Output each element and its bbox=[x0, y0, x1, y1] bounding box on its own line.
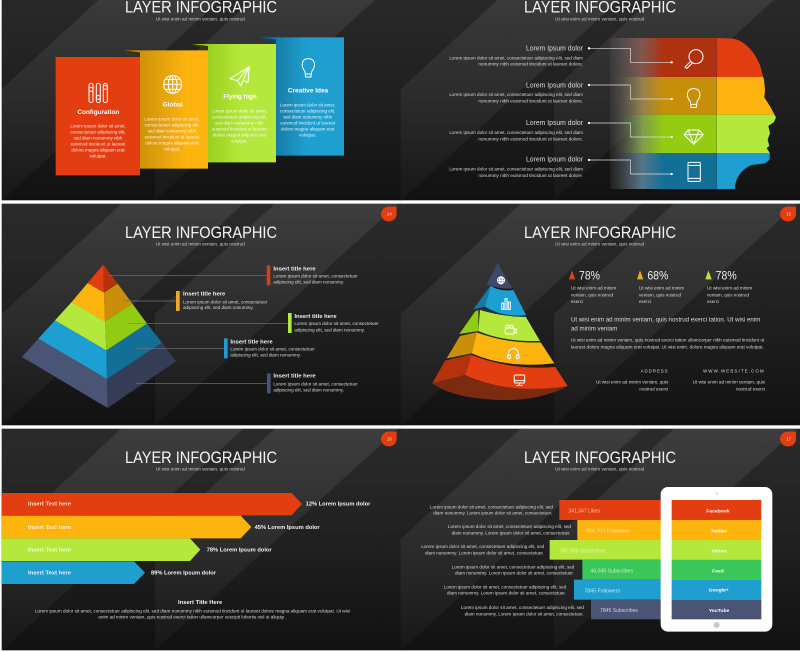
card: global: Global bbox=[163, 101, 183, 108]
icon: tablet bbox=[688, 162, 700, 181]
left descriptions: diam nonummy. Lorem ipsum dolor sit amet, consectetuer. bbox=[465, 611, 584, 616]
callout 1: adipiscing elit, sed diam nonummy. bbox=[273, 280, 344, 285]
card: global: euismod tincidunt ut laoreet bbox=[145, 134, 200, 139]
pyramid bbox=[22, 265, 176, 408]
callout 3 bbox=[128, 313, 379, 333]
tablet row: YouTube: YouTube bbox=[709, 608, 730, 614]
background bbox=[2, 0, 402, 201]
icon: monitor bbox=[514, 375, 525, 385]
tablet row: Feed: Feed bbox=[712, 568, 724, 574]
callout 4 bbox=[137, 338, 315, 358]
description: ad minim veniam bbox=[571, 325, 617, 332]
tablet row: Twitter: Twitter bbox=[711, 528, 727, 534]
stat 2 bbox=[637, 269, 685, 304]
stat 3: exerci bbox=[707, 299, 719, 304]
card: flying high: Lorem ipsum dolor sit amet, bbox=[212, 108, 267, 113]
title: LAYER INFOGRAPHIC bbox=[125, 448, 277, 467]
callout 5: Insert title here bbox=[273, 374, 316, 380]
arrow 3 bbox=[2, 538, 272, 561]
slide 6: tablet social stats bbox=[401, 429, 800, 651]
callout 5: adipiscing elit, sed diam nonummy. bbox=[273, 387, 344, 392]
item 2: Lorem Ipsum dolor bbox=[526, 82, 584, 89]
address: ADDRESS bbox=[641, 368, 668, 373]
stat 1 bbox=[569, 269, 617, 304]
faded colour bands bbox=[610, 38, 717, 189]
card: flying high: euismod tincidunt ut laoreet bbox=[212, 126, 268, 131]
subtitle: Ut wisi enim ad minim veniam, quis nostrud bbox=[555, 17, 645, 22]
card: configuration: Lorem ipsum dolor sit amet, bbox=[70, 124, 126, 129]
subtitle: Ut wisi enim ad minim veniam, quis nostrud bbox=[555, 467, 645, 472]
page badge: 16 bbox=[387, 437, 392, 442]
description: laoreet dolore magna aliquam erat volutpat. Ut wisi enim. dolore magna aliquam erat volutpat. bbox=[571, 345, 764, 350]
arrow 1 bbox=[2, 493, 371, 515]
left descriptions: Lorem ipsum dolor sit amet, consectetuer adipiscing elit, sed bbox=[444, 584, 567, 589]
left descriptions: Lorem ipsum dolor sit amet, consectetuer adipiscing elit, sed bbox=[452, 565, 575, 570]
stat 2: veniam, quis nostrud bbox=[639, 292, 681, 297]
description: Ut wisi enim ad minim veniam, quis nostrud exerci tation ullamcorper nibh euismod tincidunt ut bbox=[571, 338, 765, 343]
website: nostrud exerci bbox=[736, 387, 765, 392]
card: flying high: consectetuer adipiscing elit, bbox=[212, 114, 267, 119]
item 1: nonummy nibh euismod tincidunt ut laoreet dolore. bbox=[478, 62, 583, 67]
subtitle: Ut wisi enim ad minim veniam, quis nostrud bbox=[555, 242, 645, 247]
item 4: nonummy nibh euismod tincidunt ut laoreet dolore. bbox=[478, 173, 583, 178]
page badge: 15 bbox=[786, 212, 792, 217]
callout 3: adipiscing elit, sed diam nonummy. bbox=[294, 327, 365, 332]
background bbox=[2, 429, 402, 651]
card: creative idea: volutpat. bbox=[299, 133, 316, 138]
arrow 4 bbox=[2, 561, 217, 584]
item 2 bbox=[449, 82, 673, 103]
background bbox=[401, 0, 800, 201]
card: global: volutpat. bbox=[164, 146, 180, 151]
callout 1 bbox=[108, 265, 358, 285]
icon: camera bbox=[505, 325, 516, 334]
card: configuration: consectetuer adipiscing elit, bbox=[70, 130, 126, 135]
callout 1: Insert title here bbox=[273, 266, 316, 272]
page badge bbox=[381, 432, 397, 446]
card: creative idea: Creative Idea bbox=[288, 88, 329, 95]
card: configuration: volutpat. bbox=[90, 154, 106, 159]
item 4: Lorem ipsum dolor sit amet, consectetuer adipiscing elit, sed diam bbox=[449, 167, 583, 172]
icon: globe bbox=[497, 277, 505, 284]
icon: headphones bbox=[508, 348, 519, 359]
tablet row: Twitter bbox=[672, 520, 761, 540]
left descriptions: Lorem ipsum dolor sit amet, consectetuer adipiscing elit, sed bbox=[448, 524, 572, 529]
card: configuration bbox=[56, 57, 140, 175]
address: Ut wisi enim ad minim veniam, quis bbox=[596, 379, 669, 384]
stat 2: 68% bbox=[647, 269, 668, 282]
address: nostrud exerci bbox=[639, 387, 668, 392]
arrow 1: Insert Text here bbox=[28, 502, 71, 508]
arrow 2 bbox=[2, 516, 320, 538]
icon: diamond bbox=[684, 130, 703, 144]
stat 3: Ut wisi enim ad minim bbox=[707, 285, 753, 290]
bar: google followers bbox=[574, 580, 666, 600]
left descriptions: diam nonummy. Lorem ipsum dolor sit amet, consectetuer. bbox=[452, 530, 571, 535]
slide 4: curved pyramid with stats bbox=[401, 204, 800, 426]
card: creative idea: dolore magna aliquam erat bbox=[281, 127, 335, 132]
description bbox=[571, 316, 765, 350]
slide 5: arrow bars bbox=[2, 429, 402, 651]
text block: enim ad minim veniam, quis nostrud exerci tation ullamcorper suscipit lobortis nisl ut aliquip . bbox=[98, 614, 287, 619]
item 4 bbox=[449, 157, 673, 178]
text block: Insert Title Here bbox=[178, 600, 222, 606]
background bbox=[401, 429, 800, 651]
icon: sliders bbox=[89, 83, 107, 103]
title: LAYER INFOGRAPHIC bbox=[524, 448, 676, 467]
icon: magnifier bbox=[685, 50, 703, 69]
bar: subscribes bbox=[550, 540, 666, 560]
left descriptions: diam nonummy. Lorem ipsum dolor sit amet, consectetuer. bbox=[425, 550, 544, 555]
bar: youtube subscribes bbox=[591, 600, 666, 619]
bar: subscribes: 787,009 Subscribes bbox=[560, 549, 606, 555]
bar: likes bbox=[559, 500, 666, 520]
bar: likes: 341,347 Likes bbox=[568, 509, 600, 515]
card: global: Lorem ipsum dolor sit amet, bbox=[144, 116, 200, 121]
icon: light bulb bbox=[302, 59, 314, 77]
tablet row: YouTube bbox=[672, 600, 761, 619]
item 1: Lorem Ipsum dolor bbox=[526, 46, 584, 53]
left descriptions: Lorem ipsum dolor sit amet, consectetuer adipiscing elit, sed bbox=[430, 504, 554, 509]
stat 1: veniam, quis nostrud bbox=[571, 292, 613, 297]
icon: globe bbox=[164, 75, 182, 93]
page badge: 14 bbox=[387, 212, 392, 217]
page badge bbox=[780, 207, 796, 221]
title: LAYER INFOGRAPHIC bbox=[125, 223, 277, 242]
tablet row: Feed bbox=[672, 560, 761, 580]
subtitle: Ut wisi enim ad minim veniam, quis nostrud bbox=[156, 467, 246, 472]
page badge: 17 bbox=[786, 437, 792, 442]
layered pyramid bbox=[432, 263, 568, 400]
left descriptions: diam nonummy. Lorem ipsum dolor sit amet, consectetuer. bbox=[433, 510, 552, 515]
stat 3: veniam, quis nostrud bbox=[707, 292, 749, 297]
bar: google followers: 7845 Followers bbox=[584, 589, 620, 595]
stat 1: Ut wisi enim ad minim bbox=[571, 285, 617, 290]
card: global: dolore magna aliquam erat bbox=[145, 140, 199, 145]
tablet bbox=[661, 487, 772, 632]
card: creative idea: sed diam nonummy nibh bbox=[283, 115, 333, 120]
card: creative idea bbox=[260, 37, 344, 156]
item 1: Lorem ipsum dolor sit amet, consectetuer adipiscing elit, sed diam bbox=[449, 55, 583, 60]
slide 2: head profile bbox=[401, 0, 800, 201]
item 3 bbox=[449, 120, 673, 141]
card: global bbox=[124, 50, 208, 169]
item 1 bbox=[449, 46, 673, 67]
description: Ut wisi enim ad minim veniam, quis nostrud exerci tation. Ut wisi enim bbox=[571, 316, 760, 323]
bar: feed subscribes bbox=[582, 560, 666, 580]
background bbox=[401, 204, 800, 426]
stat 2: exerci bbox=[639, 299, 651, 304]
bar: followers bbox=[577, 520, 666, 540]
item 2: nonummy nibh euismod tincidunt ut laoreet dolore. bbox=[478, 98, 583, 103]
bar: feed subscribes: 46,045 Subscribes bbox=[590, 569, 633, 575]
icon: bulb bbox=[687, 89, 700, 107]
head silhouette bbox=[716, 38, 776, 189]
card: creative idea: Lorem ipsum dolor sit amet, bbox=[280, 103, 335, 108]
page badge bbox=[780, 432, 796, 446]
arrow 4: 89% Lorem Ipsum dolor bbox=[151, 571, 217, 577]
arrow 3: 78% Lorem Ipsum dolor bbox=[207, 548, 272, 554]
item 3: nonummy nibh euismod tincidunt ut laoreet dolore. bbox=[478, 136, 583, 141]
card: creative idea: euismod tincidunt ut laoreet bbox=[280, 121, 336, 126]
text block: Lorem ipsum dolor sit amet, consectetuer adipiscing elit, sed diam nonummy nibh euismod tincidunt ut laoreet dolore magna aliquam erat volutpat. Ut wisi bbox=[35, 608, 350, 613]
card: configuration: dolore magna aliquam erat bbox=[71, 148, 125, 153]
subtitle: Ut wisi enim ad minim veniam, quis nostrud bbox=[156, 17, 246, 22]
slide 3: isometric pyramid bbox=[2, 204, 402, 426]
tablet row: Facebook: Facebook bbox=[706, 508, 730, 514]
tablet row: Google+ bbox=[672, 580, 761, 600]
arrow 3: Insert Text here bbox=[28, 547, 71, 553]
arrow 4: Insert Text here bbox=[28, 570, 71, 576]
stat 3 bbox=[705, 269, 753, 304]
callout 2: adipiscing elit, sed diam nonummy. bbox=[183, 305, 254, 310]
item 3: Lorem Ipsum dolor bbox=[526, 120, 584, 127]
callout 5: Lorem ipsum dolor sit amet, consectetuer bbox=[273, 381, 358, 386]
callout 2: Insert title here bbox=[183, 292, 225, 298]
card: configuration: sed diam nonummy nibh bbox=[74, 136, 123, 141]
card: flying high: volutpat. bbox=[231, 138, 248, 143]
stat 1: 78% bbox=[579, 269, 600, 282]
left descriptions: Lorem ipsum dolor sit amet, consectetuer adipiscing elit, sed bbox=[461, 605, 585, 610]
icon: paper plane bbox=[230, 67, 249, 86]
card: configuration: euismod tincidunt ut laoreet bbox=[71, 142, 126, 147]
callout 2: Lorem ipsum dolor sit amet, consectetuer bbox=[183, 299, 268, 304]
callout 1: Lorem ipsum dolor sit amet, consectetuer bbox=[273, 274, 358, 279]
left descriptions: diam nonummy. Lorem ipsum dolor sit amet, consectetuer. bbox=[447, 590, 566, 595]
callout 4: Insert title here bbox=[230, 339, 273, 345]
arrow 2: 45% Lorem Ipsum dolor bbox=[255, 525, 320, 531]
callout 3: Lorem ipsum dolor sit amet, consectetuer bbox=[294, 321, 379, 326]
card: flying high: dolore magna aliquam erat bbox=[213, 132, 267, 137]
card: global: sed diam nonummy nibh bbox=[148, 128, 197, 133]
callout 4: Lorem ipsum dolor sit amet, consectetuer bbox=[230, 346, 315, 351]
callout 2 bbox=[122, 291, 268, 311]
card: creative idea: consectetuer adipiscing elit, bbox=[280, 109, 335, 114]
item 2: Lorem ipsum dolor sit amet, consectetuer adipiscing elit, sed diam bbox=[449, 92, 583, 97]
arrow 1: 12% Lorem Ipsum dolor bbox=[306, 502, 371, 508]
website: WWW.WEBSITE.COM bbox=[703, 368, 764, 373]
arrow 2: Insert Text here bbox=[28, 525, 71, 531]
title: LAYER INFOGRAPHIC bbox=[524, 223, 676, 242]
left descriptions: Lorem ipsum dolor sit amet, consectetuer adipiscing elit, sed bbox=[421, 544, 545, 549]
background bbox=[2, 204, 402, 426]
callout 5 bbox=[136, 373, 358, 393]
card: flying high: sed diam nonummy nibh bbox=[215, 120, 264, 125]
tablet row: Vimeo: Vimeo bbox=[712, 548, 726, 554]
website: Ut wisi enim ad minim veniam, quis bbox=[693, 379, 766, 384]
left descriptions bbox=[421, 504, 585, 616]
card: flying high: Flying high bbox=[223, 94, 257, 101]
stat 1: exerci bbox=[571, 299, 583, 304]
item 4: Lorem Ipsum dolor bbox=[526, 157, 584, 164]
slide 1: folded cards bbox=[2, 0, 402, 201]
card: configuration: Configuration bbox=[77, 109, 119, 116]
card: flying high bbox=[192, 44, 276, 162]
callout 3: Insert title here bbox=[294, 314, 337, 320]
text block bbox=[35, 600, 350, 619]
page badge bbox=[381, 207, 397, 221]
tablet row: Facebook bbox=[672, 500, 761, 520]
left descriptions: diam nonummy. Lorem ipsum dolor sit amet, consectetuer. bbox=[455, 571, 574, 576]
icon: bars bbox=[502, 299, 510, 309]
stat 2: Ut wisi enim ad minim bbox=[639, 285, 685, 290]
tablet row: Google+: Google+ bbox=[709, 588, 729, 594]
card: global: consectetuer adipiscing elit, bbox=[144, 122, 200, 127]
bar: followers: 654,702 Followers bbox=[586, 528, 630, 534]
tablet row: Vimeo bbox=[672, 540, 761, 560]
stat 3: 78% bbox=[716, 269, 737, 282]
item 3: Lorem ipsum dolor sit amet, consectetuer adipiscing elit, sed diam bbox=[449, 130, 583, 135]
bar: youtube subscribes: 7845 Subscribes bbox=[600, 608, 638, 614]
website bbox=[693, 368, 766, 392]
callout 4: adipiscing elit, sed diam nonummy. bbox=[230, 352, 301, 357]
subtitle: Ut wisi enim ad minim veniam, quis nostrud bbox=[156, 242, 246, 247]
address bbox=[596, 368, 669, 392]
